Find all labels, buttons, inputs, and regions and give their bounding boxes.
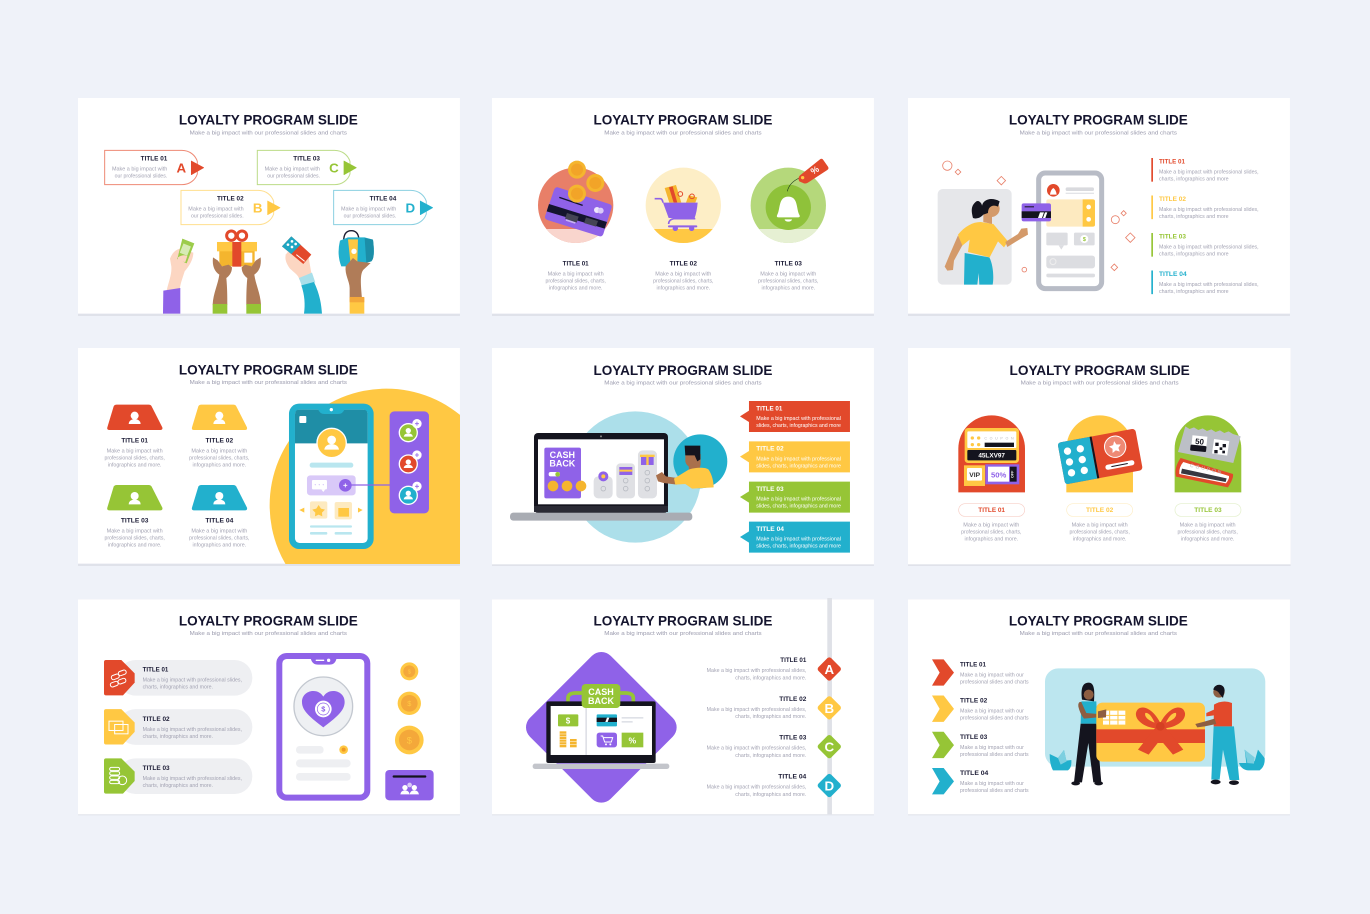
text column 3: TITLE 03 — [775, 260, 802, 267]
profile card 2: TITLE 02 — [205, 437, 234, 444]
subheading: Make a big impact with our professional slides and charts — [190, 631, 347, 637]
profile card 4: TITLE 04 — [205, 518, 234, 525]
coupon card: VIP: 50% — [991, 470, 1007, 479]
illustration: purple diamond and laptop: % — [628, 735, 636, 745]
panel: slide 5 cash back laptop — [492, 348, 874, 566]
text column 1 — [545, 260, 606, 291]
text column 3: professional slides, charts, — [758, 278, 818, 284]
profile card 4: Make a big impact with — [191, 529, 247, 535]
text column 1: Make a big impact with — [963, 522, 1019, 528]
text column 1: professional slides, charts, — [545, 278, 606, 284]
illustration: woman — [938, 189, 1028, 285]
illustration: purple diamond and laptop: BACK — [588, 696, 614, 706]
decorative outline shapes — [943, 161, 1135, 272]
illustration: phone — [289, 404, 390, 549]
coupon card: VIP — [958, 415, 1025, 492]
coupon card: barcode coupons: COUPON — [1189, 463, 1222, 476]
row 2 — [104, 709, 252, 745]
list item 4: charts, infographics and more — [1159, 289, 1229, 295]
tag C — [257, 150, 356, 185]
ribbon 1: slides, charts, infographics and more — [756, 423, 841, 429]
icon: bell and discount tag — [751, 159, 828, 243]
chevron item 4: TITLE 04 — [960, 770, 989, 777]
row 1 — [104, 660, 252, 696]
profile card 3: infographics and more. — [108, 543, 161, 549]
ribbon 3 — [740, 482, 850, 513]
profile card 2: infographics and more. — [192, 462, 246, 468]
heading: LOYALTY PROGRAM SLIDE — [1009, 612, 1188, 628]
heading: LOYALTY PROGRAM SLIDE — [593, 612, 772, 628]
heading: LOYALTY PROGRAM SLIDE — [179, 112, 358, 128]
item 3: Make a big impact with professional slides, — [707, 746, 806, 752]
profile card 2 — [189, 405, 249, 468]
ribbon 4: Make a big impact with professional — [756, 537, 841, 543]
hand with card — [282, 236, 322, 314]
panel: slide 6 coupons — [908, 348, 1291, 566]
heading: LOYALTY PROGRAM SLIDE — [593, 362, 772, 378]
heading: LOYALTY PROGRAM SLIDE — [593, 112, 772, 128]
tag C: Make a big impact with — [265, 167, 320, 173]
tag D: our professional slides. — [344, 214, 396, 220]
text column 2: Make a big impact with — [1072, 522, 1128, 528]
heading: LOYALTY PROGRAM SLIDE — [1009, 112, 1188, 128]
profile card 3: Make a big impact with — [107, 529, 163, 535]
item 2 — [707, 695, 842, 721]
illustration: purple diamond and laptop: $ — [566, 716, 571, 725]
profile card 4: infographics and more. — [192, 543, 246, 549]
item 4 — [707, 773, 842, 798]
ribbon 3: Make a big impact with professional — [756, 497, 841, 503]
subheading: Make a big impact with our professional slides and charts — [190, 130, 347, 136]
profile card 4 — [189, 485, 249, 549]
coins: $ — [407, 699, 411, 708]
profile card 3: professional slides, charts, — [104, 536, 165, 542]
profile card 1 — [104, 405, 165, 468]
ribbon 2: slides, charts, infographics and more — [756, 463, 841, 469]
pill title 3: TITLE 03 — [1194, 507, 1222, 514]
tag D: TITLE 04 — [370, 196, 397, 203]
row 3: TITLE 03 — [143, 765, 170, 772]
item 1: Make a big impact with professional slides, — [707, 668, 806, 674]
item 2: charts, infographics and more. — [735, 714, 806, 720]
chevron item 1: Make a big impact with our — [960, 672, 1024, 678]
icon: shopping cart with gifts — [646, 168, 721, 243]
profile card 1: TITLE 01 — [121, 437, 148, 444]
item 1: TITLE 01 — [780, 657, 807, 664]
coupon card: VIP: OFF — [1010, 470, 1014, 478]
list item 1 — [1151, 158, 1259, 182]
ribbon 3: TITLE 03 — [756, 486, 784, 493]
profile card 3 — [104, 485, 165, 549]
row 3 — [104, 758, 252, 794]
chevron item 1: professional slides and charts — [960, 679, 1029, 685]
list item 4: Make a big impact with professional slides, — [1159, 282, 1259, 288]
profile card 2: professional slides, charts, — [189, 455, 249, 461]
illustration: phone with heart — [279, 656, 367, 798]
ribbon 1 — [740, 401, 850, 432]
heading: LOYALTY PROGRAM SLIDE — [1009, 362, 1190, 378]
text column 3: Make a big impact with — [760, 271, 816, 277]
item 2: B — [824, 701, 834, 716]
chevron item 3 — [932, 732, 1029, 758]
list item 2: charts, infographics and more — [1159, 214, 1229, 220]
hand with cash — [163, 239, 194, 314]
list item 1: charts, infographics and more — [1159, 176, 1229, 182]
hand with shopping bag — [339, 231, 374, 314]
icon: credit card and coins — [538, 161, 613, 243]
profile card 3: TITLE 03 — [121, 518, 149, 525]
coupon card: VIP: COUPON — [984, 437, 1014, 441]
list item 3: Make a big impact with professional slides, — [1159, 244, 1259, 250]
pill title 2 — [1067, 504, 1133, 516]
illustration: purple diamond and laptop — [520, 646, 682, 808]
item 3 — [707, 734, 842, 759]
coupon card: barcode coupons — [1175, 415, 1241, 492]
tag D: Make a big impact with — [341, 207, 396, 213]
tag B: our professional slides. — [191, 214, 244, 220]
purple card with people — [385, 770, 434, 800]
list item 3 — [1151, 233, 1259, 257]
item 2: TITLE 02 — [779, 696, 807, 703]
hands with gift box — [213, 231, 261, 314]
chevron item 1: TITLE 01 — [960, 661, 986, 668]
text column 3 — [758, 260, 818, 291]
subheading: Make a big impact with our professional slides and charts — [1020, 130, 1177, 136]
subheading: Make a big impact with our professional slides and charts — [604, 130, 762, 136]
illustration: phone with heart: $ — [321, 705, 325, 714]
profile card 1: infographics and more. — [108, 462, 161, 468]
ribbon 3: slides, charts, infographics and more — [756, 504, 841, 510]
tag A: Make a big impact with — [112, 167, 167, 173]
row 2: TITLE 02 — [143, 716, 170, 723]
ribbon 1: Make a big impact with professional — [756, 416, 841, 422]
text column 2 — [653, 260, 713, 291]
chevron item 4: Make a big impact with our — [960, 781, 1024, 787]
subheading: Make a big impact with our professional slides and charts — [1021, 381, 1179, 387]
text column 3: infographics and more. — [761, 285, 815, 291]
row 1: Make a big impact with professional slides, — [143, 678, 242, 684]
row 2: charts, infographics and more. — [143, 734, 213, 740]
list item 4: TITLE 04 — [1159, 271, 1187, 278]
profile card 1: professional slides, charts, — [104, 455, 165, 461]
profile card 1: Make a big impact with — [107, 448, 163, 454]
coupon card: VIP: 45LXV97 — [978, 452, 1005, 459]
chevron item 3: professional slides and charts — [960, 752, 1029, 758]
chevron item 4 — [932, 768, 1029, 794]
tag A: our professional slides. — [115, 174, 167, 180]
coins: $ — [407, 735, 413, 745]
coins: $ — [408, 669, 412, 675]
tag C: TITLE 03 — [293, 156, 320, 163]
text column 1: infographics and more. — [964, 537, 1018, 543]
tag D: D — [405, 200, 415, 215]
item 2: Make a big impact with professional slides, — [707, 707, 806, 713]
panel: slide 9 gift card — [908, 598, 1290, 816]
illustration: phone: $ — [1083, 237, 1086, 243]
purple contact panel — [390, 411, 429, 513]
chevron item 2: professional slides and charts — [960, 716, 1029, 722]
text column 3 — [1177, 522, 1238, 543]
list item 3: charts, infographics and more — [1159, 251, 1229, 257]
ribbon 4: slides, charts, infographics and more — [756, 544, 841, 550]
item 1: charts, infographics and more. — [735, 675, 806, 681]
tag C: our professional slides. — [267, 174, 320, 180]
text column 3: infographics and more. — [1181, 537, 1234, 543]
row 3: charts, infographics and more. — [143, 783, 213, 789]
panel: slide 4 profile phone — [78, 348, 460, 566]
list item 2 — [1151, 195, 1259, 220]
text column 2: infographics and more. — [1073, 537, 1126, 543]
illustration: gift card with two people — [1045, 668, 1265, 785]
chevron item 4: professional slides and charts — [960, 788, 1029, 794]
subheading: Make a big impact with our professional slides and charts — [1020, 631, 1177, 637]
chevron item 1 — [932, 659, 1029, 686]
chevron item 2 — [932, 696, 1029, 722]
pill title 1 — [959, 504, 1025, 516]
row 2: Make a big impact with professional slides, — [143, 727, 242, 733]
tag A — [105, 150, 204, 185]
coupon card: VIP: VIP — [969, 472, 981, 479]
tag C: C — [329, 160, 339, 175]
ribbon 2 — [740, 441, 850, 472]
item 1: A — [824, 662, 834, 677]
item 3: charts, infographics and more. — [735, 753, 806, 759]
coupon card: stamp card — [1057, 415, 1143, 492]
pill title 3 — [1175, 504, 1241, 516]
tag A: A — [177, 160, 187, 175]
tag A: TITLE 01 — [141, 156, 168, 163]
panel: slide 2 three circles — [492, 98, 874, 316]
list item 1: Make a big impact with professional slides, — [1159, 169, 1259, 175]
text column 2: infographics and more. — [656, 285, 710, 291]
panel: slide 1 tags and hands — [78, 98, 460, 316]
chevron item 2: Make a big impact with our — [960, 709, 1024, 715]
row 3: Make a big impact with professional slides, — [143, 776, 242, 782]
text column 1: TITLE 01 — [563, 260, 589, 267]
icon: bell and discount tag: % — [809, 164, 821, 177]
text column 2: TITLE 02 — [670, 260, 697, 267]
text column 1: Make a big impact with — [548, 271, 604, 277]
ribbon 4: TITLE 04 — [756, 526, 784, 533]
text column 1: professional slides, charts, — [961, 529, 1021, 535]
heading: LOYALTY PROGRAM SLIDE — [179, 361, 358, 377]
heading: LOYALTY PROGRAM SLIDE — [179, 612, 358, 628]
illustration: purple diamond and laptop: CASH — [588, 687, 614, 697]
chevron item 3: TITLE 03 — [960, 734, 988, 741]
text column 2: professional slides, charts, — [653, 278, 713, 284]
illustration: laptop and man — [510, 411, 727, 543]
pill title 1: TITLE 01 — [978, 507, 1005, 514]
ribbon 4 — [740, 522, 850, 553]
illustration: laptop and man: CASH — [550, 450, 575, 460]
tag B: TITLE 02 — [217, 196, 244, 203]
profile card 4: professional slides, charts, — [189, 536, 249, 542]
list item 3: TITLE 03 — [1159, 233, 1186, 240]
text column 1: infographics and more. — [549, 285, 602, 291]
chevron item 2: TITLE 02 — [960, 698, 988, 705]
list item 2: Make a big impact with professional slides, — [1159, 207, 1259, 213]
item 3: TITLE 03 — [779, 735, 807, 742]
subheading: Make a big impact with our professional slides and charts — [604, 381, 762, 387]
subheading: Make a big impact with our professional slides and charts — [604, 631, 762, 637]
ribbon 2: TITLE 02 — [756, 446, 784, 453]
pill title 2: TITLE 02 — [1086, 507, 1114, 514]
tag B — [181, 190, 280, 225]
panel: slide 8 cash back diamonds — [492, 598, 874, 816]
item 4: D — [824, 778, 834, 793]
row 1: TITLE 01 — [143, 667, 169, 674]
item 1 — [707, 656, 842, 682]
ribbon 1: TITLE 01 — [756, 405, 783, 412]
tag D — [334, 190, 433, 225]
item 4: TITLE 04 — [778, 773, 807, 780]
panel: slide 3 phone and woman — [908, 98, 1290, 316]
vertical timeline bar — [827, 598, 832, 814]
yellow background circle — [270, 388, 460, 564]
tag B: Make a big impact with — [188, 207, 244, 213]
list item 4 — [1151, 270, 1259, 295]
text column 3: professional slides, charts, — [1177, 529, 1238, 535]
text column 2 — [1069, 522, 1130, 543]
list item 1: TITLE 01 — [1159, 158, 1185, 165]
text column 3: Make a big impact with — [1180, 522, 1236, 528]
text column 1 — [961, 522, 1021, 543]
item 3: C — [824, 740, 834, 755]
tag B: B — [253, 200, 263, 215]
item 4: Make a big impact with professional slides, — [707, 784, 806, 790]
profile card 2: Make a big impact with — [191, 448, 247, 454]
row 1: charts, infographics and more. — [143, 685, 213, 691]
panel: slide 7 heart phone — [78, 598, 460, 816]
ribbon 2: Make a big impact with professional — [756, 456, 841, 462]
illustration: phone — [1022, 173, 1102, 289]
illustration: laptop and man: BACK — [549, 459, 576, 469]
subheading: Make a big impact with our professional slides and charts — [190, 380, 347, 386]
list item 2: TITLE 02 — [1159, 196, 1186, 203]
coupon card: barcode coupons: 50 — [1195, 437, 1205, 447]
chevron item 3: Make a big impact with our — [960, 745, 1024, 751]
text column 2: professional slides, charts, — [1069, 529, 1130, 535]
coins — [395, 662, 424, 754]
text column 2: Make a big impact with — [655, 271, 711, 277]
item 4: charts, infographics and more. — [735, 792, 806, 798]
